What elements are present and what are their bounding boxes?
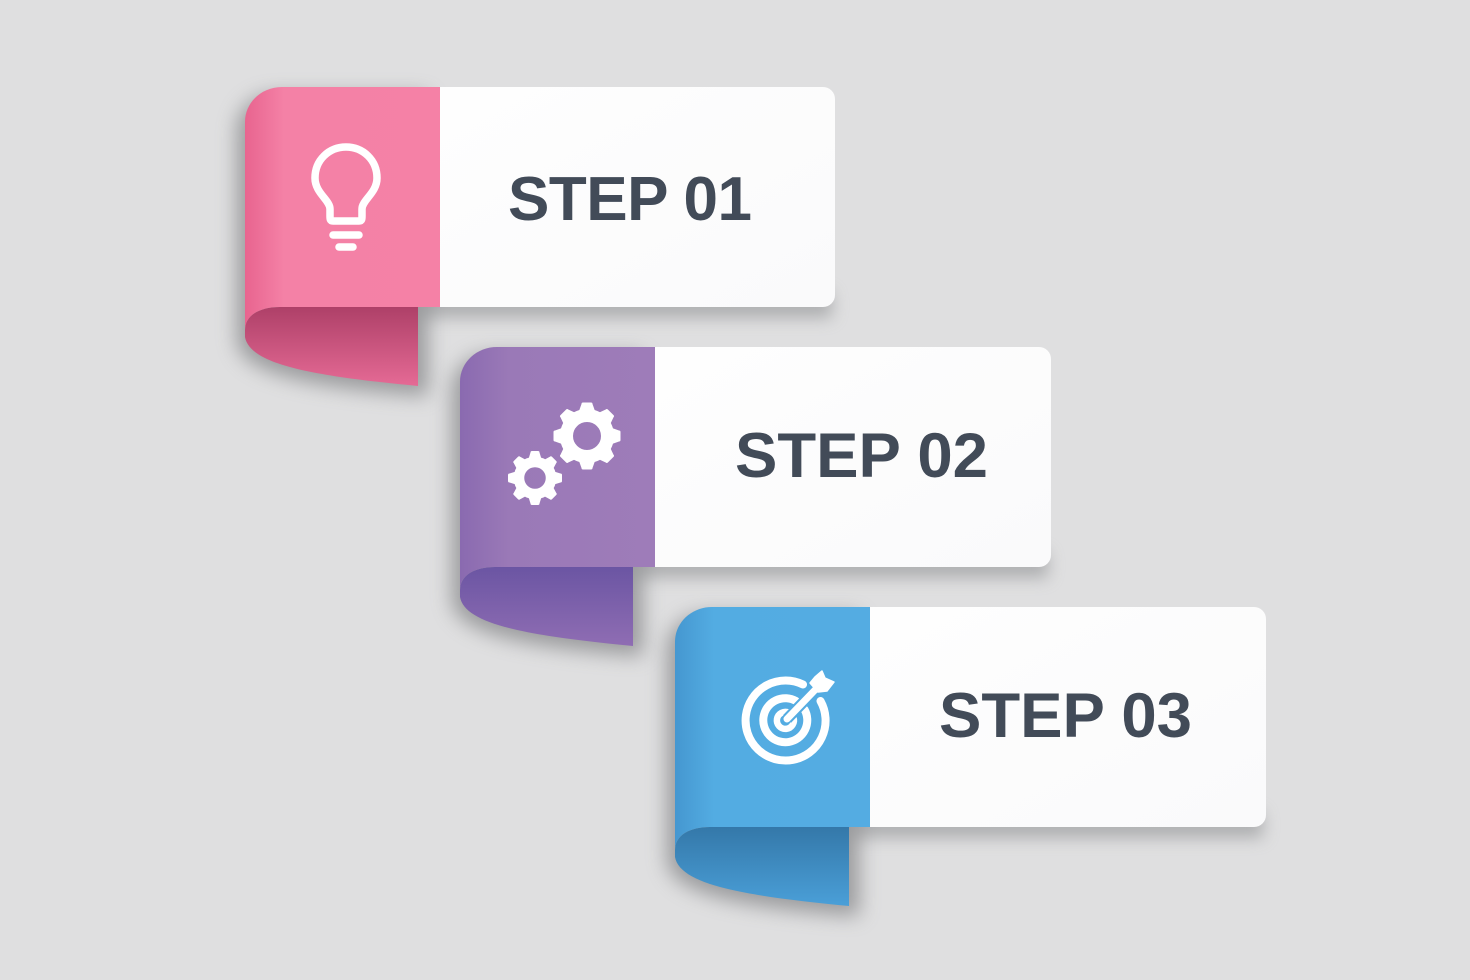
ribbon fold xyxy=(460,567,633,646)
step 03 banner xyxy=(667,607,1266,916)
coloured tab xyxy=(460,347,655,597)
ribbon fold xyxy=(675,827,849,906)
ribbon fold xyxy=(245,307,418,386)
white card xyxy=(655,347,1051,567)
white card xyxy=(440,87,835,307)
label: STEP 03 xyxy=(939,681,1192,751)
label: STEP 02 xyxy=(735,421,988,491)
step 01 banner xyxy=(237,87,835,396)
coloured tab xyxy=(245,87,440,337)
label: STEP 01 xyxy=(508,165,752,234)
white card xyxy=(870,607,1266,827)
icon: light bulb xyxy=(315,147,377,247)
coloured tab xyxy=(675,607,870,857)
icon: target with arrow xyxy=(746,671,834,761)
icon: gears xyxy=(508,402,620,505)
step 02 banner xyxy=(452,347,1051,656)
